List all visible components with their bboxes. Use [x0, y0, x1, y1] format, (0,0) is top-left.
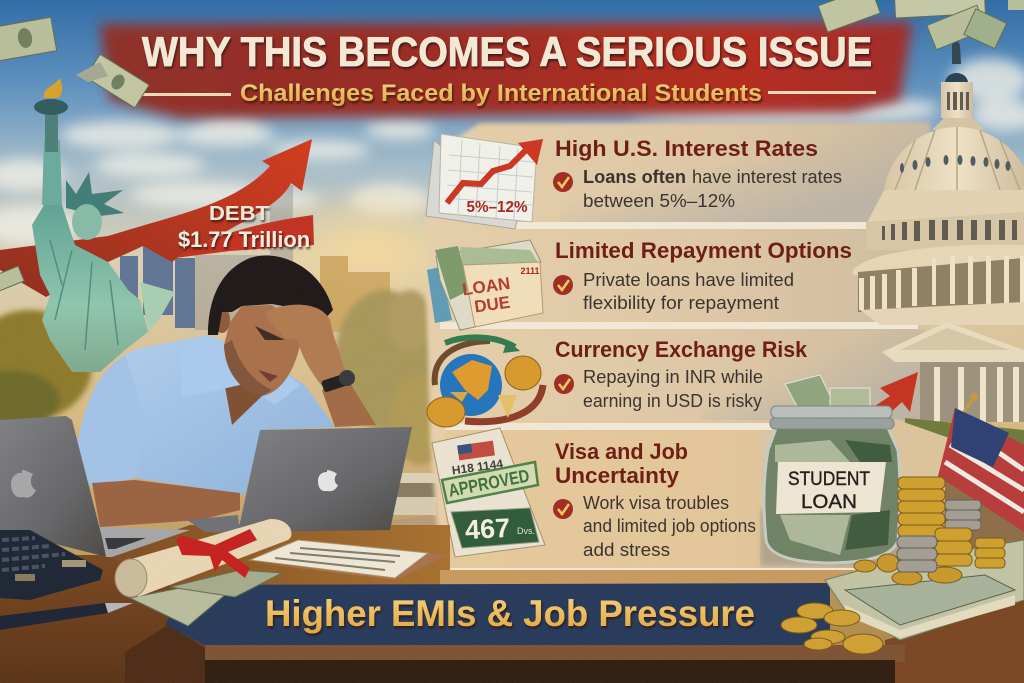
- debt label: [175, 203, 314, 258]
- coin stacks: [897, 477, 1005, 572]
- panel background: [425, 122, 930, 585]
- robe: [32, 205, 148, 372]
- raised arm: [42, 140, 62, 205]
- panel: challenges: [425, 122, 930, 585]
- body text: and limited job options: [583, 516, 756, 536]
- bottom banner: Higher EMIs & Job Pressure: [265, 593, 755, 634]
- book stack: [380, 473, 445, 552]
- icon: rising chart: 5%–12%: [466, 199, 528, 216]
- capitol building: [853, 38, 1024, 422]
- laptop right: [187, 427, 412, 533]
- stubble: [224, 340, 272, 396]
- crown: [66, 172, 124, 216]
- jar label: STUDENT: [788, 469, 870, 490]
- icon: visa documents: 467: [464, 513, 511, 545]
- heading: Uncertainty: [555, 463, 679, 488]
- distant building: [320, 256, 390, 332]
- heading: Limited Repayment Options: [555, 238, 852, 263]
- body text: between 5%–12%: [583, 191, 735, 211]
- diploma with ribbon: [115, 519, 291, 597]
- icon: visa documents: H18 1144: [451, 456, 504, 478]
- papers on desk: [250, 540, 448, 580]
- colonnade: [858, 258, 1024, 312]
- row dividers: [440, 222, 918, 574]
- watch: [321, 370, 355, 393]
- hair: [208, 255, 333, 335]
- faded buildings: [195, 185, 293, 330]
- icon: rising chart: [426, 134, 543, 229]
- tablet: [140, 282, 175, 332]
- statue of liberty: [32, 78, 175, 372]
- head: [72, 204, 102, 240]
- calculator: [0, 530, 103, 600]
- cash pile and coins: [781, 540, 1024, 654]
- subtitle: Challenges Faced by International Students: [240, 80, 762, 107]
- money jar: student loan: [764, 375, 900, 563]
- check icon: [553, 275, 573, 295]
- sleeve shade and collar: [78, 355, 146, 488]
- student person: [78, 255, 376, 527]
- stone wall and hedge behind jar: [892, 418, 1024, 560]
- subtitle: [143, 80, 876, 107]
- red arrow: [0, 139, 312, 297]
- check icon: [553, 172, 573, 192]
- body text: add stress: [583, 540, 670, 560]
- flag: [938, 393, 1024, 532]
- money: floating bills: [0, 0, 1024, 294]
- jar label: LOAN: [801, 492, 857, 513]
- face: [224, 305, 302, 396]
- robe folds: [50, 240, 118, 350]
- shirt: [78, 335, 335, 495]
- title: WHY THIS BECOMES A SERIOUS ISSUE: [142, 28, 872, 75]
- body text: earning in USD is risky: [583, 391, 762, 411]
- hand on forehead: [266, 305, 345, 386]
- pediment: [882, 322, 1024, 362]
- icon: globe and coins: [427, 337, 543, 427]
- apple logo: [318, 470, 338, 491]
- pen: [0, 603, 133, 630]
- ear: [214, 307, 230, 333]
- icon: loan due papers: LOAN: [461, 274, 511, 299]
- drum: [866, 190, 1024, 225]
- small red arrow near capitol: [872, 372, 918, 413]
- debt arrow chart: [0, 139, 314, 330]
- neck: [212, 345, 285, 428]
- debt label: $1.77 Trillion: [178, 227, 310, 252]
- forearm raised: [322, 383, 376, 427]
- lantern: [941, 82, 973, 118]
- jar label: [776, 462, 886, 514]
- body text: flexibility for repayment: [583, 293, 779, 313]
- body text: Work visa troubles: [583, 493, 729, 513]
- arm on desk: [92, 480, 240, 527]
- body text: Private loans have limited: [583, 270, 794, 290]
- item: currency risk: [427, 337, 807, 427]
- dome: [884, 127, 1024, 190]
- item: visa and job: [432, 428, 756, 560]
- heading: Currency Exchange Risk: [555, 337, 807, 362]
- body text: Loans often: [583, 167, 686, 187]
- icon: visa documents: APPROVED: [447, 465, 531, 501]
- check icon: [554, 374, 574, 394]
- torch: [45, 112, 58, 152]
- lantern statue: [952, 38, 961, 64]
- item: high interest rates: [426, 134, 842, 229]
- heading: High U.S. Interest Rates: [555, 136, 818, 161]
- laptop left: [0, 416, 190, 557]
- title banner: [100, 22, 912, 118]
- desk front corner: [125, 625, 205, 683]
- body text: Repaying in INR while: [583, 367, 763, 387]
- brow and eye shade: [255, 326, 285, 340]
- icon: visa documents: Dvs.: [517, 526, 535, 536]
- icon: loan due papers: [427, 240, 543, 330]
- bottom banner: [165, 583, 905, 683]
- apple logo: [11, 470, 36, 498]
- icon: loan due papers: DUE: [473, 293, 511, 316]
- blue bars: [120, 245, 195, 328]
- portico: [920, 362, 1024, 422]
- desk: [0, 525, 1024, 683]
- icon: loan due papers: 2111: [520, 266, 540, 276]
- bills under diploma: [130, 570, 282, 626]
- trees left: [0, 290, 450, 465]
- debt label: DEBT: [209, 203, 269, 225]
- item: limited repayment: [427, 238, 852, 330]
- base: [860, 302, 1024, 325]
- check icon: [553, 499, 573, 519]
- body text: have interest rates: [692, 167, 842, 187]
- icon: visa documents: [432, 428, 545, 557]
- heading: Visa and Job: [555, 439, 688, 464]
- mouth: [258, 370, 278, 382]
